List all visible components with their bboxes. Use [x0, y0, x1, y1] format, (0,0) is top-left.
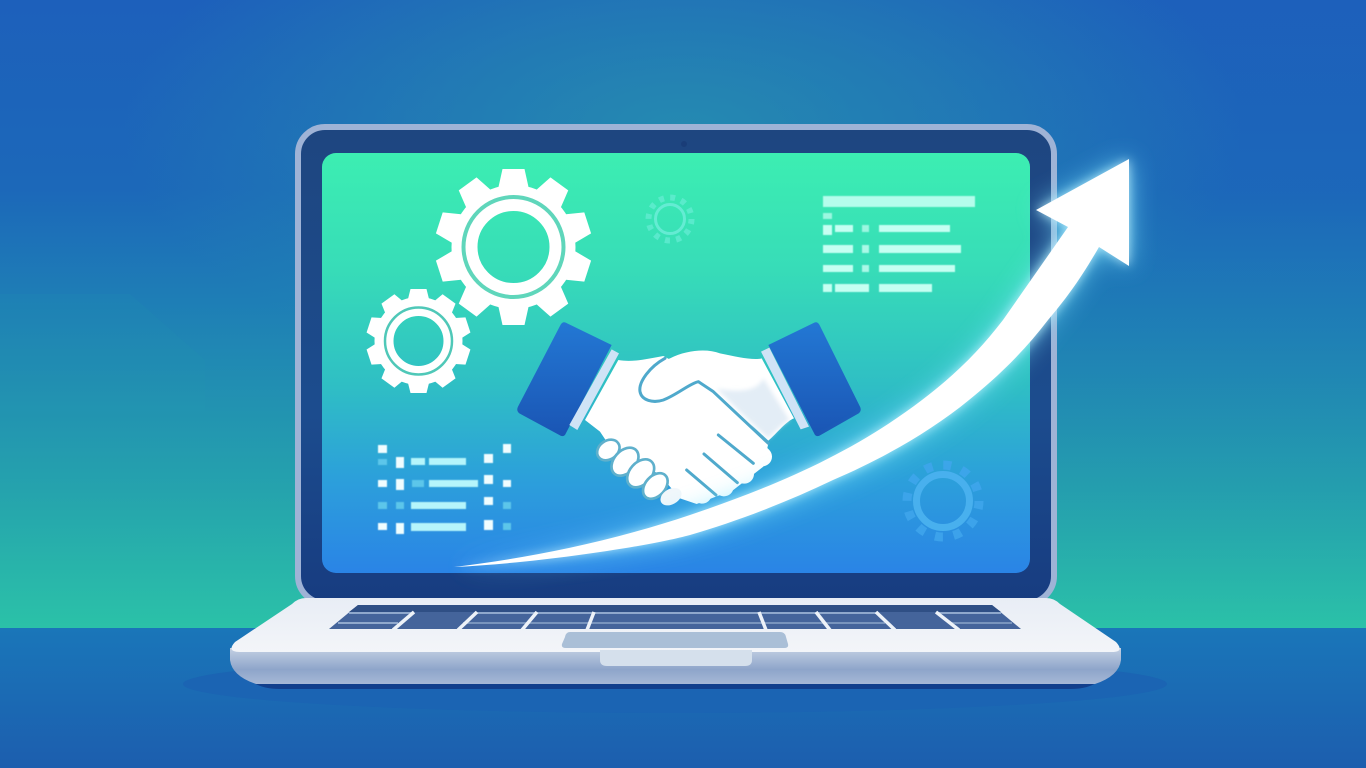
- laptop screen: [322, 153, 1030, 573]
- palm shading: [717, 378, 789, 438]
- left hand: [585, 356, 768, 504]
- floor: [0, 628, 1366, 768]
- list: top right data rows: [823, 196, 975, 292]
- icon: faint gear top: [648, 198, 692, 240]
- laptop base: [230, 598, 1121, 689]
- right cuff: [761, 322, 861, 436]
- left cuff: [517, 322, 619, 436]
- base shadow: [250, 680, 1100, 689]
- icon: small gear: [366, 289, 471, 393]
- icon: faint gear bottom: [907, 465, 979, 537]
- icon: large gear: [435, 169, 592, 325]
- touchpad: [562, 632, 788, 648]
- notch: [600, 650, 752, 666]
- fingertips: [687, 428, 762, 494]
- laptop lid: [298, 127, 1054, 603]
- list: bottom left data rows: [378, 444, 511, 534]
- hand outlines: [640, 358, 768, 495]
- arrow: growth curve: [454, 159, 1129, 567]
- keyboard: [329, 605, 1021, 630]
- base deck: [231, 598, 1120, 652]
- fingers: [593, 435, 685, 509]
- base front edge: [230, 648, 1121, 684]
- icon: handshake: [517, 322, 861, 509]
- right hand: [640, 351, 794, 441]
